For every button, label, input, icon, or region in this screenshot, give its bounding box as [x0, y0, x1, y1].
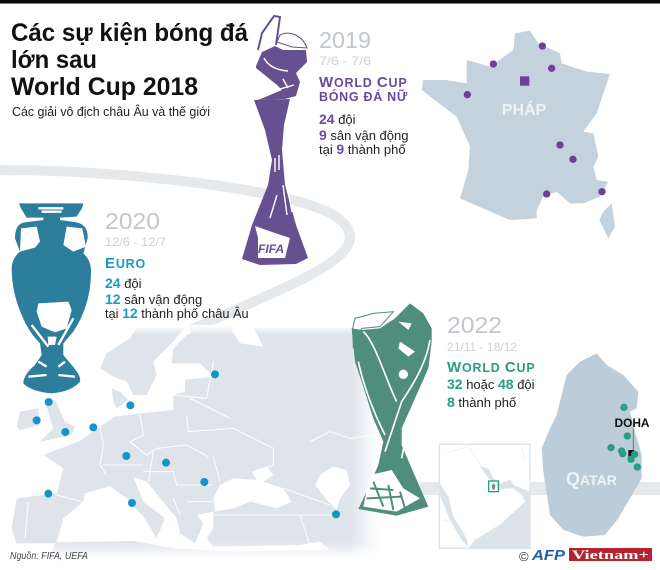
block: 2022: WORLD CUP [447, 359, 535, 376]
block: 2020: 12/6 - 12/7 [105, 235, 166, 249]
trophy: Euro [12, 203, 91, 393]
block: 2022: 32 hoặc 48 đội [447, 376, 535, 392]
source: Nguồn: FIFA, UEFA [10, 550, 88, 562]
block: 2022: 2022 [447, 312, 502, 338]
block: 2020: 12 sân vận động [105, 291, 202, 307]
block: 2019: 24 đội [319, 111, 356, 127]
subtitle: Các giải vô địch châu Âu và thế giới [12, 104, 210, 119]
block: 2022: 8 thành phố [447, 394, 516, 410]
map: Europe [0, 325, 380, 565]
label: Doha: DOHA [614, 416, 650, 430]
map: Gulf inset [439, 444, 530, 548]
block: 2019 [319, 27, 408, 157]
horizontal band [420, 482, 660, 495]
logo: Vietnam+: Vietnam+ [572, 547, 649, 562]
label: France: PHÁP [502, 100, 547, 119]
title [11, 19, 248, 101]
block: 2019: BÓNG ĐÁ NỮ [319, 89, 408, 104]
title: Các sự kiện bóng đá [11, 19, 248, 47]
top bar [0, 0, 660, 4]
block: 2022 [447, 312, 535, 410]
Europe venue dots [33, 370, 340, 518]
block: 2020: EURO [105, 255, 146, 272]
Qatar locator box [489, 481, 498, 492]
block: 2020: 24 đội [105, 275, 142, 291]
label: Qatar: QATAR [566, 469, 617, 489]
block: 2019: 2019 [319, 27, 371, 53]
map: Qatar [542, 353, 642, 537]
logo: AFP: AFP [531, 547, 566, 564]
copyright mark: © [519, 549, 529, 564]
trophy: Women's World Cup [242, 16, 308, 265]
title: World Cup 2018 [11, 73, 198, 101]
map: France [422, 31, 615, 238]
logo: Vietnam+ [569, 547, 652, 562]
block: 2019: tại 9 thành phố [319, 141, 406, 157]
swoosh band [0, 170, 350, 330]
trophy: World Cup [352, 303, 432, 516]
block: 2019: WORLD CUP [319, 74, 407, 91]
block: 2020 [105, 208, 249, 321]
title: lớn sau [11, 46, 97, 74]
France venue dots [464, 42, 606, 198]
trophy: Women's World Cup: FIFA [258, 244, 284, 256]
block: 2020: 2020 [105, 208, 160, 234]
Qatar venue dots [607, 404, 641, 471]
block: 2020: tại 12 thành phố châu Âu [105, 305, 249, 321]
block: 2019: 9 sân vận động [319, 127, 408, 143]
block: 2022: 21/11 - 18/12 [447, 340, 517, 354]
block: 2019: 7/6 - 7/6 [319, 54, 371, 68]
